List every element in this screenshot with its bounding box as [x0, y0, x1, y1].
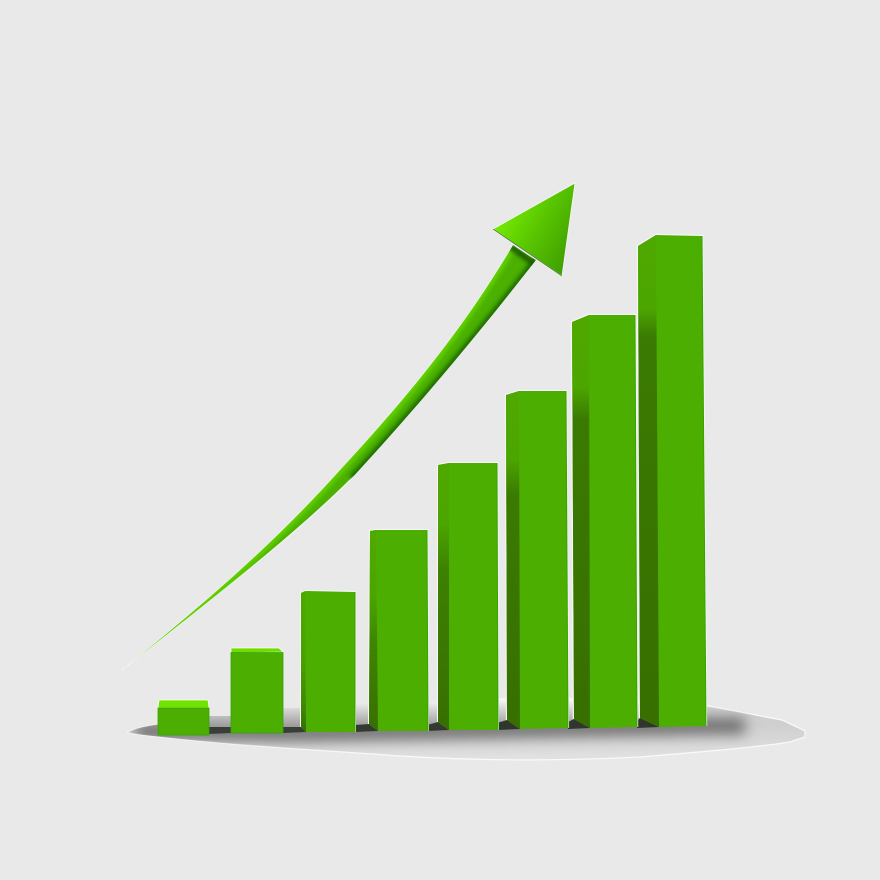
bar 6: [506, 391, 568, 729]
bar 4: [369, 530, 428, 731]
bar 1: [158, 700, 209, 735]
bar 7: [572, 315, 637, 728]
floor shadow: [128, 706, 805, 760]
growth arrow: [122, 183, 575, 670]
bar 8: [638, 235, 706, 727]
bar 5: [438, 463, 498, 730]
arrow head: [493, 183, 575, 276]
bar 3: [301, 591, 355, 732]
bar 2: [231, 648, 283, 733]
infographic: rising bar chart with arrow: [122, 182, 806, 760]
arrow shaft: [122, 245, 540, 670]
gap shadows between bars: [209, 698, 659, 734]
